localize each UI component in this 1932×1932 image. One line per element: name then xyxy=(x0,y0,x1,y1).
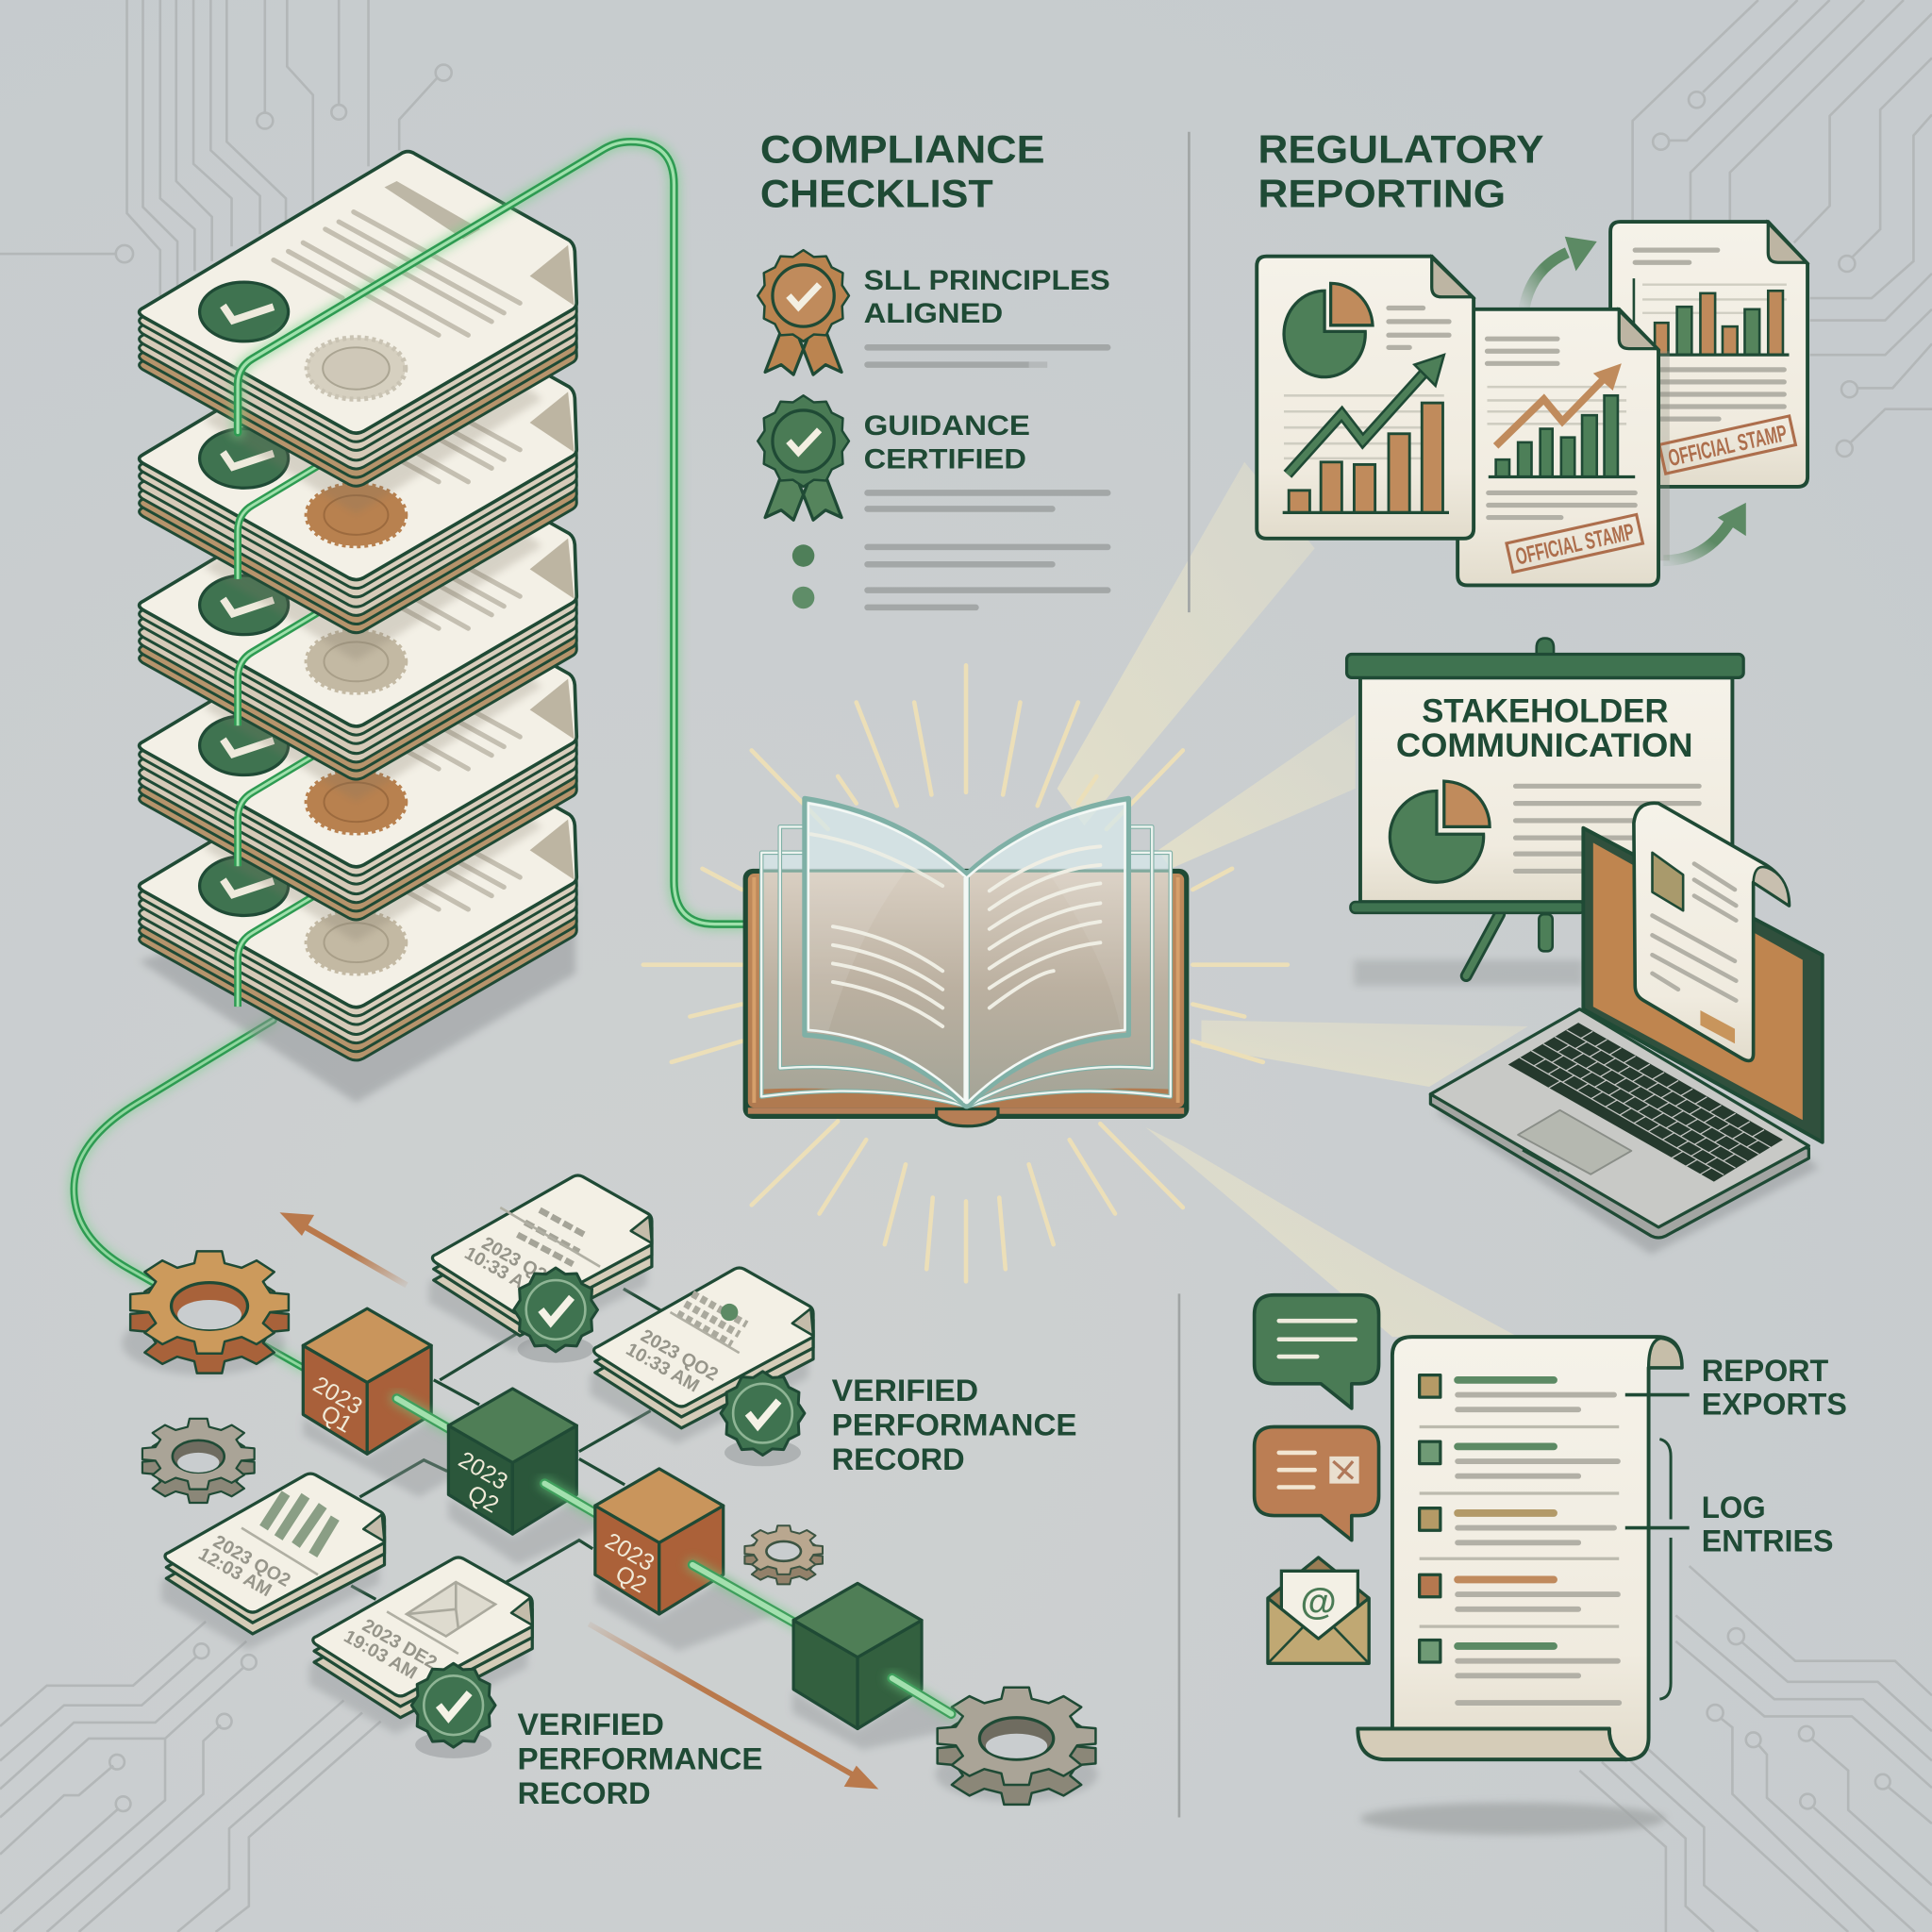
presentation screen: stakeholder communication: COMMUNICATION xyxy=(1396,727,1693,764)
gear: orange start xyxy=(122,1251,289,1375)
green data line: stack to timeline xyxy=(74,1020,303,1368)
text: verified performance record right: VERIFIED xyxy=(832,1373,978,1407)
arrow: report flow up xyxy=(1524,237,1597,308)
cube: 2023 Q1: 2023 xyxy=(308,1372,366,1420)
document card: 2023 Q2 10:33 AM upper: 10:33 A xyxy=(461,1242,527,1293)
cube: 2023 Q2 orange: Q2 xyxy=(610,1561,651,1598)
text: guidance certified xyxy=(864,410,1108,508)
document card: 2023 QO2 10:33 AM xyxy=(591,1268,813,1444)
glowing link Q2 to end cube xyxy=(692,1565,801,1626)
report page 3: OFFICIAL STAMP xyxy=(1666,421,1790,472)
text: verified performance record bottom: PERFORMANCE xyxy=(518,1741,762,1776)
arrow: report flow down xyxy=(1663,503,1746,560)
report page 2: OFFICIAL STAMP xyxy=(1513,520,1637,571)
text: log entries: ENTRIES xyxy=(1702,1523,1834,1557)
cube: 2023 Q2 orange xyxy=(595,1469,776,1651)
timeline connectors xyxy=(351,1289,661,1599)
document card: 2023 QO2 12:03 AM xyxy=(161,1474,385,1650)
document stack 5 xyxy=(140,724,576,1060)
icon: bronze rosette xyxy=(758,250,849,375)
arrow: timeline forward xyxy=(589,1624,878,1789)
text: SLL principles aligned xyxy=(864,265,1110,365)
cube: 2023 Q1 xyxy=(303,1308,492,1497)
text: report exports: REPORT xyxy=(1702,1353,1828,1388)
text: verified performance record right: RECORD xyxy=(832,1441,965,1476)
checklist bullets xyxy=(792,544,1108,608)
radiating light rays xyxy=(643,665,1288,1281)
text: verified performance record bottom xyxy=(518,1707,762,1810)
document stack 2 xyxy=(140,297,576,633)
badge: verified check 2 xyxy=(721,1372,805,1466)
text: verified performance record right xyxy=(832,1373,1077,1476)
heading: regulatory reporting xyxy=(1258,126,1544,215)
light beams from book xyxy=(1058,462,1528,1337)
icon: orange chat bubble xyxy=(1255,1426,1379,1541)
document card: 2023 DE2 19:03 AM: 2023 DE2 xyxy=(358,1615,441,1674)
cube: 2023 Q2 orange: 2023 xyxy=(601,1528,658,1576)
text: guidance certified: CERTIFIED xyxy=(864,443,1026,475)
text: verified performance record bottom: VERIFIED xyxy=(518,1707,664,1741)
document stack 4 xyxy=(140,584,576,920)
document card: 2023 QO2 12:03 AM: 12:03 AM xyxy=(195,1543,275,1601)
icon: green chat bubble xyxy=(1255,1295,1379,1408)
document card: 2023 QO2 10:33 AM: 10:33 AM xyxy=(623,1339,703,1396)
document stack 1 xyxy=(140,152,576,486)
open glass book xyxy=(743,798,1189,1126)
text: SLL principles aligned: ALIGNED xyxy=(864,298,1003,329)
icon: green rosette xyxy=(758,395,849,520)
badge: verified check 1 xyxy=(514,1268,597,1363)
gear: grey end xyxy=(935,1688,1098,1805)
text: verified performance record bottom: RECORD xyxy=(518,1775,651,1810)
document card: 2023 QO2 10:33 AM: 2023 QO2 xyxy=(637,1325,722,1386)
gear: small tan xyxy=(744,1525,823,1584)
cube: 2023 Q2 green: Q2 xyxy=(463,1481,503,1519)
presentation screen: stakeholder communication: STAKEHOLDER xyxy=(1422,692,1668,729)
heading: compliance checklist: CHECKLIST xyxy=(760,171,993,215)
report page 2 xyxy=(1457,309,1658,585)
cube: 2023 Q2 green: 2023 xyxy=(454,1447,511,1495)
glowing link Q2 to Q2 xyxy=(544,1484,604,1518)
glowing link end cube to gear xyxy=(892,1678,951,1714)
heading: regulatory reporting: REPORTING xyxy=(1258,171,1506,215)
document card: 2023 Q2 10:33 AM upper: 2023 Q2 xyxy=(478,1233,550,1286)
green data line: stack to book xyxy=(238,142,743,924)
cube: 2023 Q2 green xyxy=(448,1389,616,1565)
heading: regulatory reporting: REGULATORY xyxy=(1258,126,1544,171)
stack shadow xyxy=(140,887,575,1103)
text: verified performance record right: PERFORMANCE xyxy=(832,1407,1077,1442)
badge: verified check 3 xyxy=(411,1663,495,1758)
heading: compliance checklist: COMPLIANCE xyxy=(760,126,1045,171)
cube: green end xyxy=(792,1583,974,1750)
text: log entries xyxy=(1702,1490,1834,1557)
heading: compliance checklist xyxy=(760,126,1045,215)
document card: 2023 Q2 10:33 AM upper xyxy=(429,1175,652,1352)
cube: 2023 Q1: Q1 xyxy=(316,1401,356,1439)
icon: email envelope xyxy=(1268,1557,1369,1663)
gear: grey left xyxy=(142,1419,255,1503)
glowing link Q1 to Q2 xyxy=(397,1398,458,1434)
report page 1 xyxy=(1257,257,1474,539)
icon: email envelope: @ xyxy=(1300,1582,1337,1623)
text: guidance certified: GUIDANCE xyxy=(864,410,1030,441)
text: log entries: LOG xyxy=(1702,1490,1766,1524)
laptop with document xyxy=(1430,803,1823,1255)
arrow: timeline backward xyxy=(279,1212,407,1285)
document card: 2023 QO2 12:03 AM: 2023 QO2 xyxy=(209,1531,294,1591)
document card: 2023 DE2 19:03 AM xyxy=(309,1557,532,1734)
callout leaders and bracket xyxy=(1625,1395,1690,1699)
report page 3 xyxy=(1610,222,1807,560)
presentation screen: stakeholder communication xyxy=(1347,639,1743,986)
text: report exports xyxy=(1702,1353,1847,1421)
scroll log document xyxy=(1357,1337,1682,1835)
document card: 2023 DE2 19:03 AM: 19:03 AM xyxy=(341,1626,421,1684)
text: SLL principles aligned: SLL PRINCIPLES xyxy=(864,265,1110,296)
document stack 3 xyxy=(140,443,576,779)
text: report exports: EXPORTS xyxy=(1702,1386,1847,1421)
